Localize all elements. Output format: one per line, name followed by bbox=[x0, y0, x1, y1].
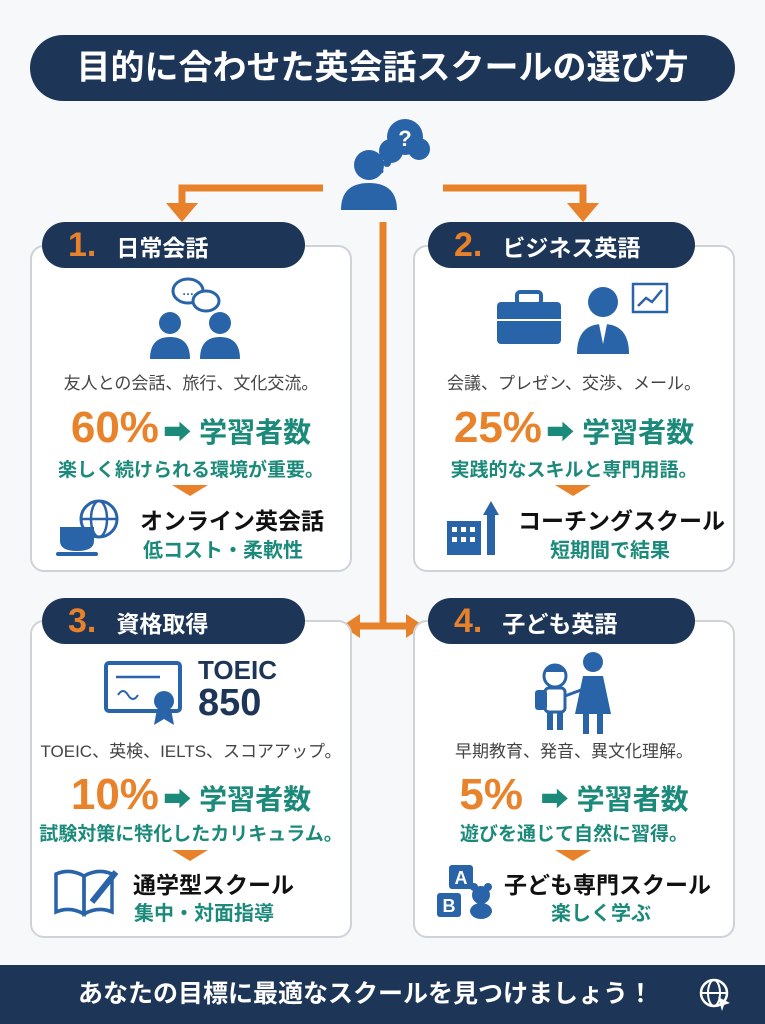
description: 早期教育、発音、異文化理解。 bbox=[455, 742, 693, 761]
heading 4 bbox=[428, 598, 695, 644]
icon: certificate TOEIC 850: TOEIC bbox=[198, 655, 277, 685]
icon: ABC blocks and bear bbox=[437, 865, 492, 919]
icon: coffee and globe bbox=[56, 500, 118, 556]
note: 実践的なスキルと専門用語。 bbox=[450, 460, 698, 481]
footer banner bbox=[0, 965, 765, 1024]
icon: thinking person: ? bbox=[398, 126, 412, 151]
icon: thinking person bbox=[341, 119, 430, 210]
title bbox=[30, 35, 735, 101]
panel: 2 business English bbox=[413, 222, 735, 572]
recommendation: オンライン英会話 bbox=[140, 508, 324, 534]
footer banner: あなたの目標に最適なスクールを見つけましょう！ bbox=[78, 980, 653, 1008]
recommendation: 子ども専門スクール bbox=[504, 872, 711, 898]
stat 25%: 25% ➡ 学習者数 bbox=[454, 403, 694, 452]
stat 5%: 5% ➡ 学習者数 bbox=[459, 770, 689, 819]
panel: 2 business English: 短期間で結果 bbox=[550, 540, 670, 562]
icon: conversation people bbox=[150, 278, 240, 359]
panel: 3 certification: 集中・対面指導 bbox=[134, 903, 274, 925]
note: 遊びを通じて自然に習得。 bbox=[460, 824, 688, 845]
panel: 1 daily conversation: 低コスト・柔軟性 bbox=[143, 540, 303, 562]
recommendation: コーチングスクール bbox=[518, 508, 725, 534]
icon: ABC blocks and bear: B bbox=[442, 896, 456, 916]
icon: book and pencil bbox=[54, 870, 118, 917]
icon: building growth bbox=[447, 501, 499, 555]
icon: conversation people: … bbox=[182, 284, 194, 298]
heading 2: 2. ビジネス英語 bbox=[454, 226, 640, 264]
recommendation: 通学型スクール bbox=[133, 872, 294, 898]
icon: globe cursor bbox=[700, 978, 730, 1011]
flow arrows bbox=[166, 184, 599, 638]
note: 楽しく続けられる環境が重要。 bbox=[58, 460, 324, 481]
panel: 4 kids English: 楽しく学ぶ bbox=[551, 903, 651, 925]
heading 4: 4. 子ども英語 bbox=[454, 602, 617, 640]
description: TOEIC、英検、IELTS、スコアアップ。 bbox=[40, 742, 342, 761]
heading 3 bbox=[42, 598, 305, 644]
panel: 4 kids English bbox=[413, 598, 735, 938]
heading 1: 1. 日常会話 bbox=[68, 226, 208, 264]
icon: briefcase and businessman bbox=[497, 282, 668, 354]
heading 2 bbox=[428, 222, 695, 268]
stat 60%: 60% ➡ 学習者数 bbox=[71, 403, 311, 452]
icon: child and parent bbox=[535, 652, 611, 734]
stat 10%: 10% ➡ 学習者数 bbox=[71, 770, 311, 819]
note: 試験対策に特化したカリキュラム。 bbox=[39, 824, 343, 845]
icon: certificate TOEIC 850: 850 bbox=[198, 682, 261, 724]
description: 会議、プレゼン、交渉、メール。 bbox=[447, 374, 701, 393]
icon: ABC blocks and bear: A bbox=[454, 868, 468, 888]
panel: 3 certification bbox=[30, 598, 352, 938]
title: 目的に合わせた英会話スクールの選び方 bbox=[76, 49, 688, 87]
panel: 1 daily conversation bbox=[30, 222, 352, 572]
description: 友人との会話、旅行、文化交流。 bbox=[64, 374, 318, 393]
heading 1 bbox=[42, 222, 305, 268]
heading 3: 3. 資格取得 bbox=[68, 602, 208, 640]
icon: certificate TOEIC 850 bbox=[104, 655, 277, 725]
